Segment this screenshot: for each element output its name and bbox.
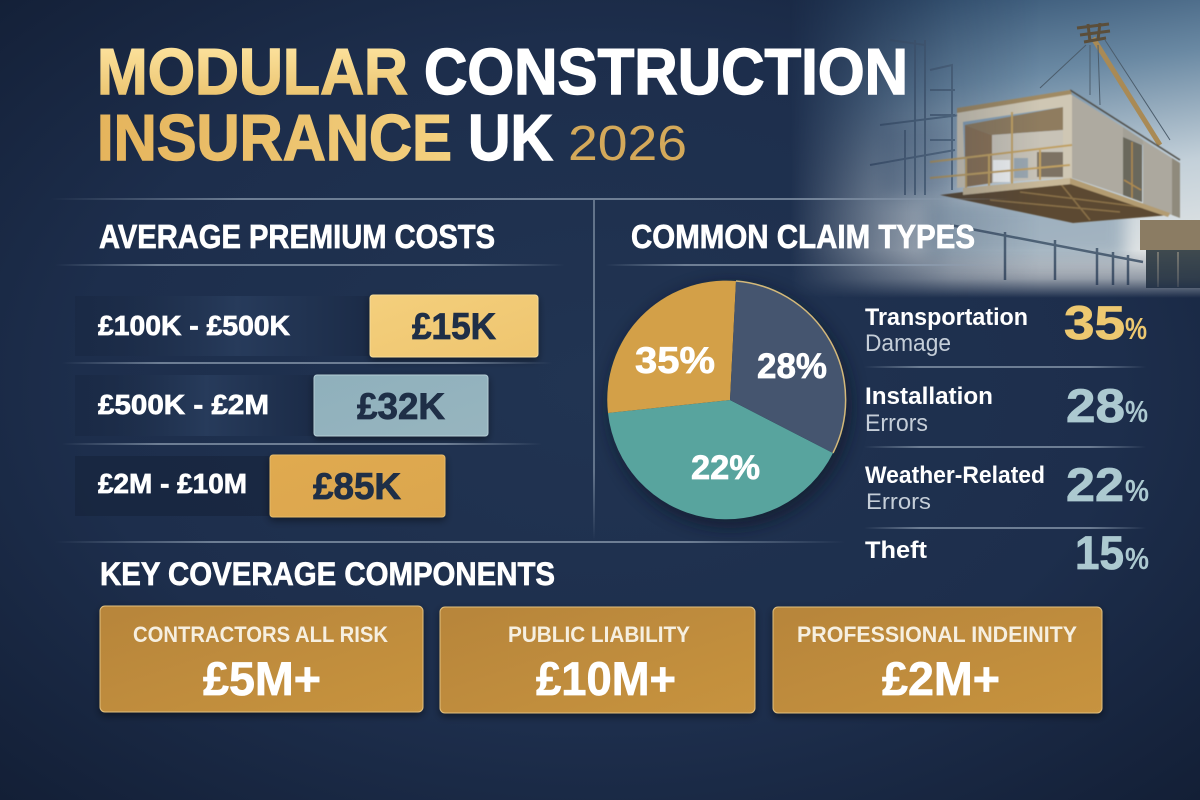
claim row: installation errors: % — [1125, 394, 1148, 429]
claim row: weather-related errors — [865, 458, 1149, 514]
row: £2M - £10M: £85K — [313, 466, 401, 507]
card: public liability — [440, 607, 755, 713]
side walls — [1072, 95, 1123, 195]
fence — [950, 225, 1143, 285]
row: £2M - £10M: £2M - £10M — [98, 468, 247, 499]
lower building — [1140, 220, 1200, 288]
claim row: weather-related errors: % — [1125, 473, 1149, 508]
title: MODULAR — [97, 35, 408, 108]
ghosted lower structure — [925, 200, 1125, 260]
claim row: weather-related errors: Weather-Related — [865, 462, 1045, 489]
title: CONSTRUCTION — [424, 35, 908, 108]
row: £100K - £500K: £100K - £500K — [98, 310, 290, 341]
panel: common claim types — [607, 218, 1149, 579]
balcony rail — [930, 112, 1072, 188]
card: contractors all risk: CONTRACTORS ALL RISK — [133, 622, 388, 647]
claim row: theft: % — [1125, 541, 1149, 576]
claim row: transportation damage: Damage — [865, 330, 951, 357]
claim row: installation errors — [865, 379, 1148, 437]
card: contractors all risk — [100, 606, 423, 712]
title — [97, 35, 908, 174]
card: public liability: £10M+ — [536, 652, 676, 705]
claim row: transportation damage: Transportation — [865, 304, 1028, 331]
underside — [940, 178, 1170, 223]
ghosted scaffold — [870, 40, 960, 197]
claim row: transportation damage: 35 — [1064, 296, 1125, 349]
row: £500K - £2M: £32K — [357, 386, 445, 427]
module — [930, 90, 1180, 223]
card: professional indemnity: PROFESSIONAL INDEINITY — [797, 622, 1077, 647]
title: UK — [468, 101, 553, 174]
card: professional indemnity — [773, 607, 1102, 713]
claim row: installation errors: 28 — [1066, 379, 1125, 432]
row: £100K - £500K — [75, 295, 538, 357]
photo: modular building lifted by crane — [790, 0, 1200, 300]
claim row: weather-related errors: Errors — [866, 489, 931, 514]
front opening — [965, 107, 1063, 135]
claim row: installation errors: Installation — [865, 383, 993, 410]
card: professional indemnity: £2M+ — [882, 652, 1000, 705]
pie chart — [607, 281, 852, 528]
front frame — [957, 90, 1072, 188]
pie chart: 22% — [691, 449, 760, 487]
claim row: transportation damage — [865, 296, 1147, 357]
pie chart: 35% — [635, 340, 715, 381]
floor edge — [963, 178, 1072, 195]
divider lines — [50, 198, 1010, 543]
claim row: transportation damage: % — [1125, 311, 1147, 346]
crane — [1040, 23, 1170, 145]
card: contractors all risk: £5M+ — [203, 652, 321, 705]
row: £500K - £2M — [75, 375, 488, 436]
panel: average premium costs — [62, 218, 552, 517]
panel: key coverage components — [100, 556, 1102, 713]
heading: key coverage components: KEY COVERAGE COMPONENTS — [100, 556, 555, 592]
heading: average premium costs: AVERAGE PREMIUM COSTS — [99, 218, 495, 255]
title: 2026 — [568, 117, 687, 171]
claim row: installation errors: Errors — [865, 410, 928, 437]
claim row: weather-related errors: 22 — [1066, 458, 1124, 511]
heading: common claim types: COMMON CLAIM TYPES — [631, 218, 975, 255]
pie chart: 28% — [757, 347, 827, 386]
row: £100K - £500K: £15K — [412, 306, 496, 347]
row: £2M - £10M — [75, 455, 445, 517]
title: INSURANCE — [97, 101, 452, 174]
card: public liability: PUBLIC LIABILITY — [508, 622, 690, 647]
row: £500K - £2M: £500K - £2M — [98, 389, 269, 420]
claim row: theft — [865, 526, 1149, 579]
claim row: theft: 15 — [1075, 526, 1124, 579]
claim row: theft: Theft — [865, 537, 927, 564]
